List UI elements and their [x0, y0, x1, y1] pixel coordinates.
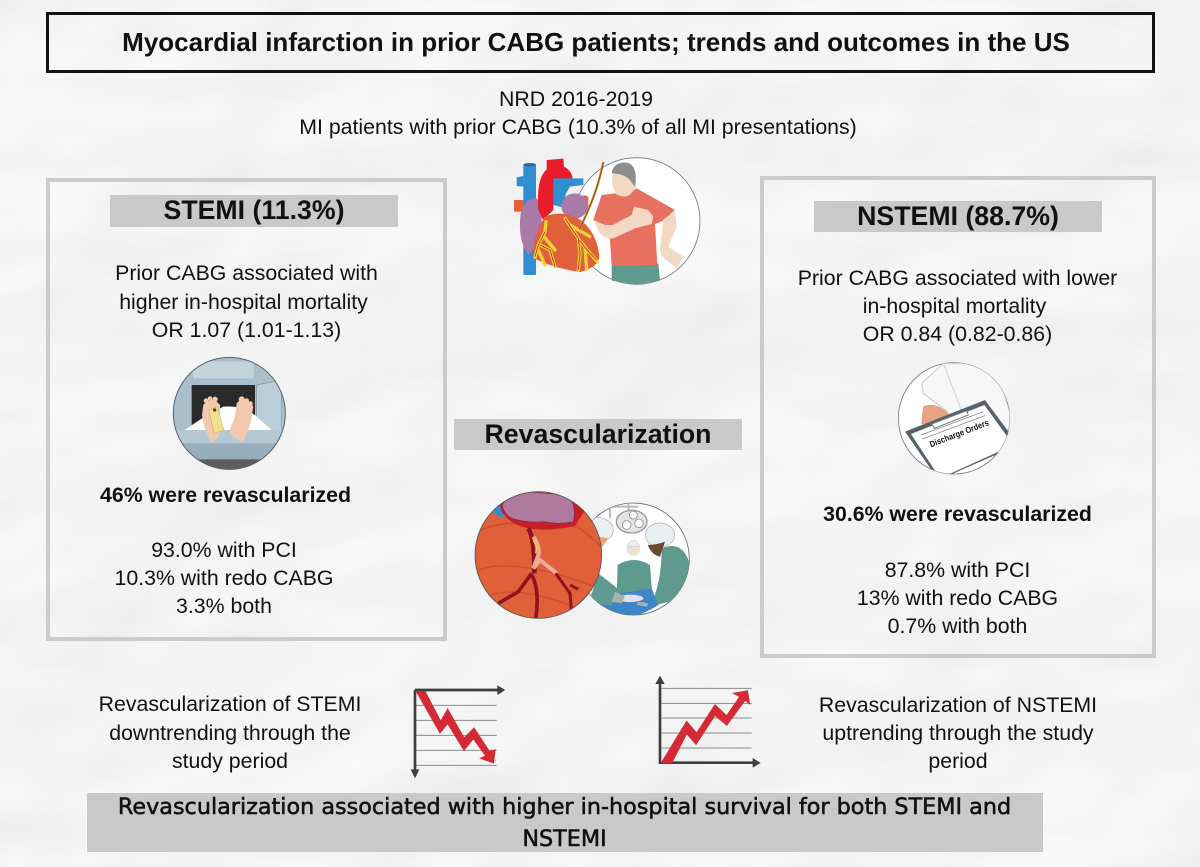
NSTEMI mortality text: Prior CABG associated with lower: [798, 266, 1117, 290]
NSTEMI trend text: uptrending through the study: [822, 721, 1094, 745]
NSTEMI revascularization breakdown: 0.7% with both: [888, 614, 1027, 638]
heading: NSTEMI: [814, 201, 1102, 232]
heading: STEMI: STEMI (11.3%): [164, 195, 344, 225]
heading: STEMI: [110, 195, 398, 227]
STEMI revascularization breakdown: 10.3% with redo CABG: [114, 566, 334, 590]
title: Myocardial infarction in prior CABG patients; trends and outcomes in the US: [122, 27, 1070, 57]
STEMI trend text: downtrending through the: [109, 720, 351, 744]
STEMI trend text: Revascularization of STEMI: [99, 692, 361, 716]
heading: NSTEMI: NSTEMI (88.7%): [857, 201, 1059, 231]
NSTEMI revascularization breakdown: 87.8% with PCI: [885, 558, 1030, 582]
conclusion banner: NSTEMI: [522, 826, 607, 852]
study population text: NRD 2016-2019: [499, 87, 653, 111]
study population text: [299, 87, 857, 139]
icon: heart and man with chest pain: [514, 157, 700, 285]
STEMI mortality text: OR 1.07 (1.01-1.13): [152, 318, 341, 342]
NSTEMI trend text: period: [928, 749, 988, 773]
NSTEMI mortality text: [798, 266, 1117, 346]
panel: NSTEMI: [760, 176, 1156, 658]
NSTEMI revascularization breakdown: 13% with redo CABG: [857, 586, 1058, 610]
icon: uptrend chart: [655, 676, 760, 768]
title: [46, 12, 1155, 73]
STEMI revascularization breakdown: 93.0% with PCI: [151, 538, 297, 562]
icon: downtrend chart: [410, 685, 506, 778]
icon: morgue tray with toe tag: [172, 356, 286, 470]
STEMI revascularization breakdown: [114, 538, 334, 618]
NSTEMI mortality text: OR 0.84 (0.82-0.86): [863, 322, 1052, 346]
NSTEMI revascularized text: 30.6% were revascularized: [823, 502, 1092, 526]
STEMI mortality text: higher in-hospital mortality: [119, 290, 368, 314]
study population text: MI patients with prior CABG (10.3% of all MI presentations): [299, 115, 857, 139]
conclusion banner: [87, 793, 1043, 852]
conclusion banner: Revascularization associated with higher in-hospital survival for both STEMI and: [118, 794, 1011, 820]
icon: discharge orders clipboard: Discharge Orders: [928, 417, 990, 449]
NSTEMI revascularization breakdown: [857, 558, 1058, 638]
STEMI revascularized text: 46% were revascularized: [100, 483, 351, 507]
heading: Revascularization: Revascularization: [485, 419, 711, 449]
STEMI revascularization breakdown: 3.3% both: [176, 594, 272, 618]
NSTEMI mortality text: in-hospital mortality: [863, 294, 1046, 318]
STEMI trend text: [99, 692, 361, 773]
icon: discharge orders clipboard: [898, 362, 1010, 474]
NSTEMI trend text: [819, 693, 1097, 773]
NSTEMI trend text: Revascularization of NSTEMI: [819, 693, 1097, 717]
panel: STEMI: [46, 178, 447, 641]
STEMI mortality text: Prior CABG associated with: [115, 261, 378, 285]
STEMI trend text: study period: [172, 749, 288, 773]
STEMI mortality text: [115, 261, 378, 342]
icon: coronary surgery: [474, 491, 690, 619]
